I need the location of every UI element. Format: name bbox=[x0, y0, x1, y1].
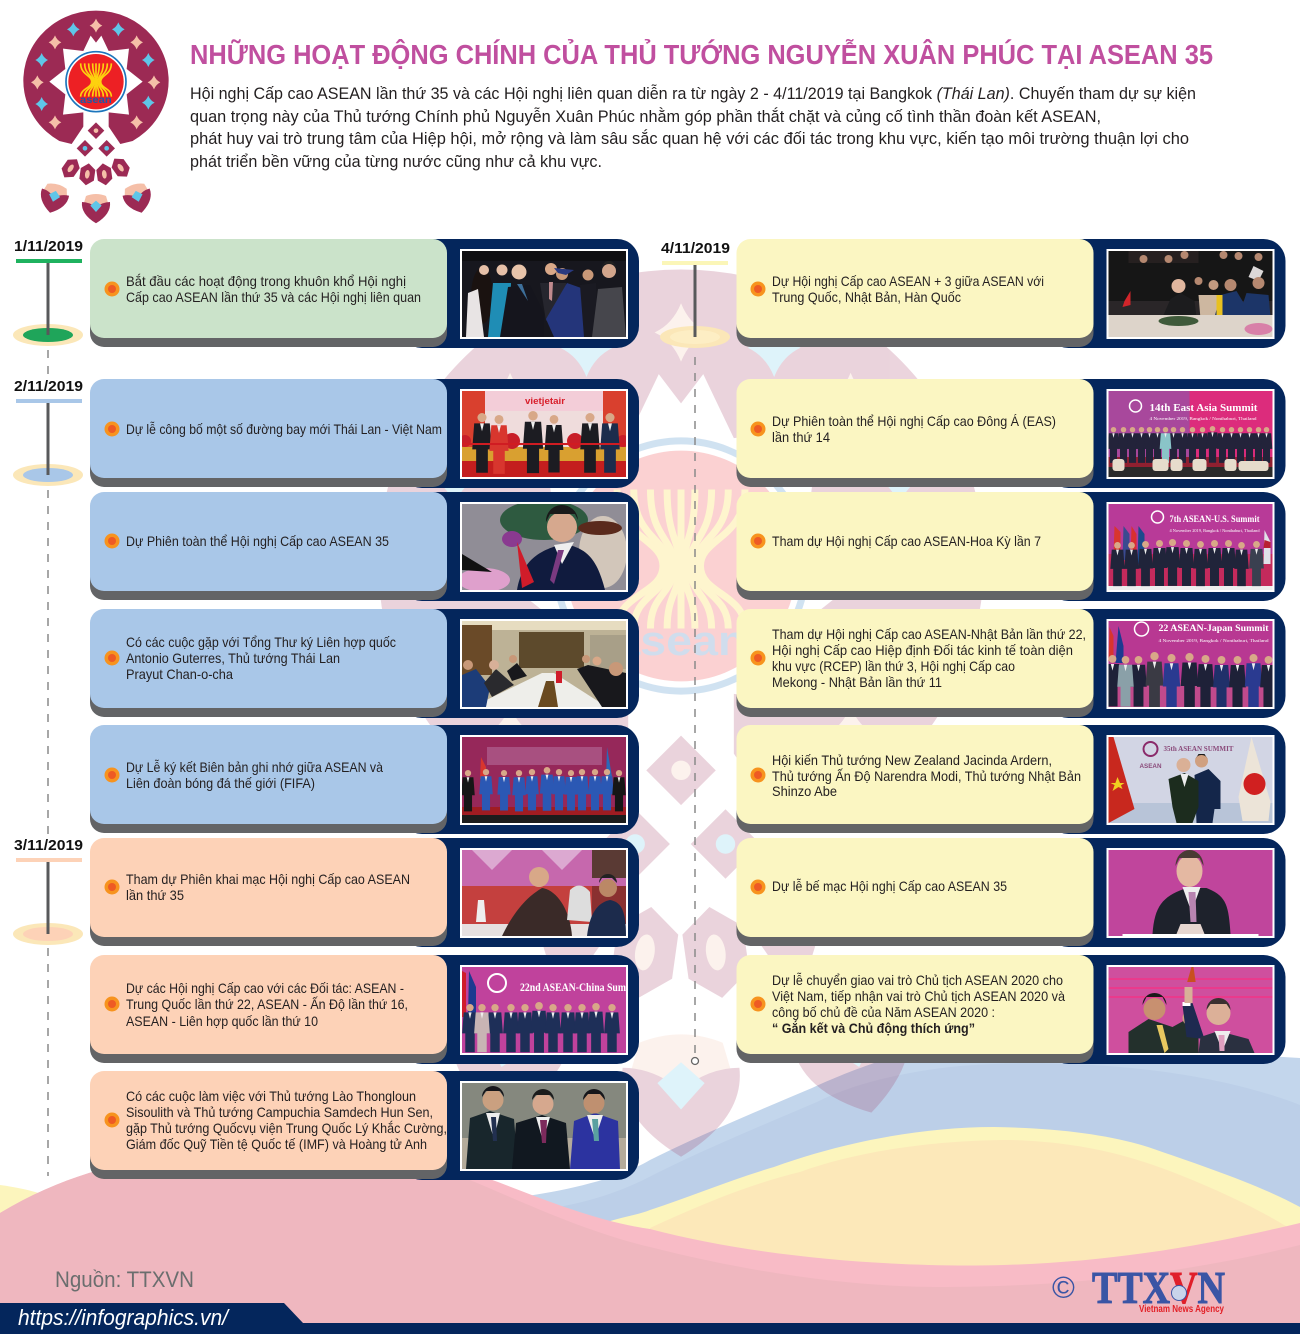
photo: ribbon cutting bbox=[459, 391, 629, 477]
card text: Bắt đầu các hoạt động trong khuôn khổ Hội nghị bbox=[126, 273, 406, 289]
card face bbox=[90, 609, 447, 708]
photo: ribbon cutting: vietjetair bbox=[525, 396, 566, 406]
card text: Hội nghị Cấp cao Hiệp định Đối tác kinh tế toàn diện bbox=[772, 642, 1073, 658]
intro text: phát huy vai trò trung tâm của Hiệp hội, mở rộng và làm sâu sắc quan hệ với các đối tác trong khu vực, kiến tạo môi trường thuận lợi cho bbox=[190, 129, 1189, 148]
card text: Hội kiến Thủ tướng New Zealand Jacinda Ardern, bbox=[772, 752, 1052, 768]
card text: Dự lễ chuyển giao vai trò Chủ tịch ASEAN 2020 cho bbox=[772, 972, 1063, 988]
timeline: 2/11/2019: 2/11/2019 bbox=[14, 379, 83, 395]
card text: Có các cuộc gặp với Tổng Thư ký Liên hợp quốc bbox=[126, 634, 396, 650]
bullet icon bbox=[104, 768, 120, 782]
card text: Tham dự Hội nghị Cấp cao ASEAN-Hoa Kỳ lần 7 bbox=[772, 533, 1041, 549]
card: Vietjet routes bbox=[90, 379, 639, 488]
card text bbox=[126, 980, 408, 1029]
photo: ASEAN-China summit: 22nd ASEAN-China Sum bbox=[520, 982, 626, 994]
logo: TTXVN: Vietnam News Agency bbox=[1139, 1304, 1224, 1315]
card text: công bố chủ đề của Năm ASEAN 2020 : bbox=[772, 1004, 995, 1020]
card text: Tham dự Phiên khai mạc Hội nghị Cấp cao ASEAN bbox=[126, 871, 410, 887]
card face bbox=[90, 725, 447, 824]
bullet icon bbox=[104, 650, 120, 666]
watermark: large ASEAN emblem: asean bbox=[614, 617, 746, 664]
photo: summit table bbox=[1108, 251, 1272, 337]
card text: Liên đoàn bóng đá thế giới (FIFA) bbox=[126, 775, 315, 791]
photo: opening session delegates bbox=[462, 850, 626, 936]
photo: ASEAN-Japan group: 22 ASEAN-Japan Summit bbox=[1158, 624, 1269, 634]
bullet icon bbox=[750, 534, 766, 548]
card text bbox=[772, 273, 1044, 305]
intro text: quan trọng này của Thủ tướng Chính phủ Nguyễn Xuân Phúc nhằm góp phần thắt chặt và củng cố tình thần đoàn kết ASEAN, bbox=[190, 107, 1101, 126]
logo: TTXVN: TTXVN bbox=[1092, 1262, 1225, 1313]
photo: handshake with flags: ASEAN bbox=[1140, 764, 1162, 770]
card face bbox=[90, 1071, 447, 1170]
timeline: 4/11/2019 bbox=[660, 241, 730, 348]
bullet icon bbox=[750, 282, 766, 296]
timeline: 3/11/2019 bbox=[13, 838, 83, 945]
card: bilateral meetings bbox=[90, 1071, 639, 1180]
card text: Sisoulith và Thủ tướng Campuchia Samdech Hun Sen, bbox=[126, 1104, 433, 1120]
card: ASEAN+3 bbox=[736, 239, 1286, 348]
card text: Giám đốc Quỹ Tiền tệ Quốc tế (IMF) và Hoàng tử Anh bbox=[126, 1136, 427, 1152]
timeline: 2/11/2019 bbox=[13, 379, 83, 486]
photo: ASEAN-China summit bbox=[462, 967, 626, 1053]
card text: Antonio Guterres, Thủ tướng Thái Lan bbox=[126, 650, 340, 666]
card face bbox=[90, 955, 447, 1054]
logo: TTXVN: © bbox=[1052, 1270, 1075, 1305]
bullet icon bbox=[104, 880, 120, 894]
photo: East Asia Summit group: 14th East Asia Summit bbox=[1150, 403, 1258, 414]
card text: lần thứ 35 bbox=[126, 887, 184, 903]
timeline: 3/11/2019: 3/11/2019 bbox=[14, 838, 83, 854]
intro text: phát triển bền vững của từng nước cũng như cả khu vực. bbox=[190, 152, 602, 171]
card text bbox=[126, 634, 396, 682]
card face bbox=[90, 492, 447, 591]
card: closing ceremony bbox=[736, 838, 1286, 947]
photo: three prime ministers bbox=[462, 1083, 626, 1169]
photo: gavel handover bbox=[1108, 967, 1272, 1053]
photo: East Asia Summit group bbox=[1108, 391, 1272, 477]
card face bbox=[736, 838, 1094, 937]
background waves bbox=[0, 1052, 1300, 1334]
bullet icon bbox=[750, 880, 766, 894]
card text: Dự lễ bế mạc Hội nghị Cấp cao ASEAN 35 bbox=[772, 878, 1007, 894]
photo: closing speech bbox=[1108, 850, 1272, 936]
card text bbox=[772, 413, 1056, 445]
card text: khu vực (RCEP) lần thứ 3, Hội nghị Cấp cao bbox=[772, 658, 1015, 674]
photo: East Asia Summit group: 4 November 2019, Bangkok / Nonthaburi, Thailand bbox=[1150, 416, 1257, 422]
card face bbox=[90, 239, 447, 338]
timeline end marker bbox=[692, 1058, 698, 1064]
card: FIFA memorandum bbox=[90, 725, 639, 834]
card text: Có các cuộc làm việc với Thủ tướng Lào Thongloun bbox=[126, 1088, 416, 1104]
card: chairmanship handover bbox=[736, 955, 1286, 1064]
card: UN Secretary-General meeting bbox=[90, 609, 639, 718]
card text: Dự Phiên toàn thể Hội nghị Cấp cao ASEAN 35 bbox=[126, 533, 389, 549]
card face bbox=[736, 379, 1094, 478]
card text: Dự lễ công bố một số đường bay mới Thái Lan - Việt Nam bbox=[126, 421, 442, 437]
photo: ASEAN-US group bbox=[1108, 504, 1272, 590]
bullet icon bbox=[750, 422, 766, 436]
card text: Trung Quốc, Nhật Bản, Hàn Quốc bbox=[772, 289, 961, 305]
bullet icon bbox=[104, 282, 120, 296]
card text bbox=[772, 626, 1086, 690]
card text: ASEAN - Liên hợp quốc lần thứ 10 bbox=[126, 1013, 318, 1029]
card text bbox=[772, 972, 1065, 1036]
photo: bilateral meeting room bbox=[462, 621, 626, 707]
card text: Prayut Chan-o-cha bbox=[126, 666, 233, 682]
photo: ASEAN-US group: 4 November 2019, Bangkok / Nonthaburi, Thailand bbox=[1170, 528, 1260, 534]
card text bbox=[126, 1088, 447, 1152]
bullet icon bbox=[750, 996, 766, 1012]
photo: arrival greeting bbox=[462, 251, 626, 337]
card: bilateral talks bbox=[736, 725, 1286, 834]
card text: Việt Nam, tiếp nhận vai trò Chủ tịch ASEAN 2020 và bbox=[772, 988, 1065, 1004]
card text: lần thứ 14 bbox=[772, 429, 830, 445]
photo: handshake with flags: 35th ASEAN SUMMIT bbox=[1164, 744, 1234, 753]
card text bbox=[772, 752, 1081, 799]
photo: handshake with flags bbox=[1108, 737, 1272, 823]
card face bbox=[736, 239, 1094, 338]
card text bbox=[126, 871, 410, 903]
card: 1/11 opening bbox=[90, 239, 639, 348]
card: ASEAN-US bbox=[736, 492, 1286, 601]
bullet icon bbox=[104, 996, 120, 1012]
photo: prime minister at table bbox=[458, 500, 627, 592]
intro text: Hội nghị Cấp cao ASEAN lần thứ 35 và các Hội nghị liên quan diễn ra từ ngày 2 - 4/11/2019 tại Bangkok (Thái Lan). Chuyến tham dự sự kiện bbox=[190, 84, 1196, 103]
bullet icon bbox=[104, 1112, 120, 1128]
card: plenary session bbox=[90, 492, 639, 601]
card text: Thủ tướng Ấn Độ Narendra Modi, Thủ tướng Nhật Bản bbox=[772, 768, 1081, 784]
photo: ASEAN-Japan group bbox=[1104, 621, 1277, 708]
photo: ASEAN-Japan group: 4 November 2019, Bangkok / Nonthaburi, Thailand bbox=[1158, 638, 1269, 644]
source credit: Nguồn: TTXVN bbox=[55, 1267, 194, 1292]
card text bbox=[126, 273, 421, 305]
card: ASEAN-Japan bbox=[736, 609, 1286, 718]
card: East Asia Summit bbox=[736, 379, 1286, 488]
photo: ASEAN-US group: 7th ASEAN-U.S. Summit bbox=[1170, 514, 1260, 524]
card face bbox=[736, 492, 1094, 591]
card text: Dự Lễ ký kết Biên bản ghi nhớ giữa ASEAN và bbox=[126, 759, 383, 775]
card text: Dự Hội nghị Cấp cao ASEAN + 3 giữa ASEAN với bbox=[772, 273, 1044, 289]
card text: Tham dự Hội nghị Cấp cao ASEAN-Nhật Bản lần thứ 22, bbox=[772, 626, 1086, 642]
card text bbox=[126, 759, 383, 791]
title: NHỮNG HOẠT ĐỘNG CHÍNH CỦA THỦ TƯỚNG NGUYỄN XUÂN PHÚC TẠI ASEAN 35 bbox=[190, 38, 1213, 70]
card text: Trung Quốc lần thứ 22, ASEAN - Ấn Độ lần thứ 16, bbox=[126, 996, 408, 1012]
card text: Dự các Hội nghị Cấp cao với các Đối tác: ASEAN - bbox=[126, 980, 404, 996]
timeline: 1/11/2019: 1/11/2019 bbox=[14, 239, 83, 255]
card text: Cấp cao ASEAN lần thứ 35 và các Hội nghị liên quan bbox=[126, 289, 421, 305]
card face bbox=[736, 725, 1094, 824]
timeline: 4/11/2019: 4/11/2019 bbox=[661, 241, 730, 257]
bullet icon bbox=[750, 650, 766, 666]
card face bbox=[90, 838, 447, 937]
card: partner summits bbox=[90, 955, 639, 1064]
card text: Shinzo Abe bbox=[772, 783, 837, 799]
timeline dashes bbox=[48, 350, 695, 1176]
card face bbox=[90, 379, 447, 478]
bullet icon bbox=[104, 422, 120, 436]
footer url: https://infographics.vn/ bbox=[18, 1305, 230, 1330]
logo: ASEAN emblem bbox=[23, 11, 169, 223]
card face bbox=[736, 955, 1094, 1054]
bullet icon bbox=[104, 534, 120, 548]
intro text bbox=[190, 84, 1196, 171]
bullet icon bbox=[750, 768, 766, 782]
logo: ASEAN emblem: asean bbox=[80, 95, 112, 106]
card text: Mekong - Nhật Bản lần thứ 11 bbox=[772, 674, 942, 690]
card: opening ceremony bbox=[90, 838, 639, 947]
card text: “ Gắn kết và Chủ động thích ứng” bbox=[772, 1019, 975, 1036]
card text: Dự Phiên toàn thể Hội nghị Cấp cao Đông Á (EAS) bbox=[772, 413, 1056, 429]
card text: gặp Thủ tướng Quốcvụ viện Trung Quốc Lý Khắc Cường, bbox=[126, 1120, 447, 1136]
photo: FIFA shirts bbox=[461, 737, 626, 823]
footer bar bbox=[0, 1303, 1300, 1334]
card face bbox=[736, 609, 1094, 708]
timeline: 1/11/2019 bbox=[13, 239, 83, 346]
